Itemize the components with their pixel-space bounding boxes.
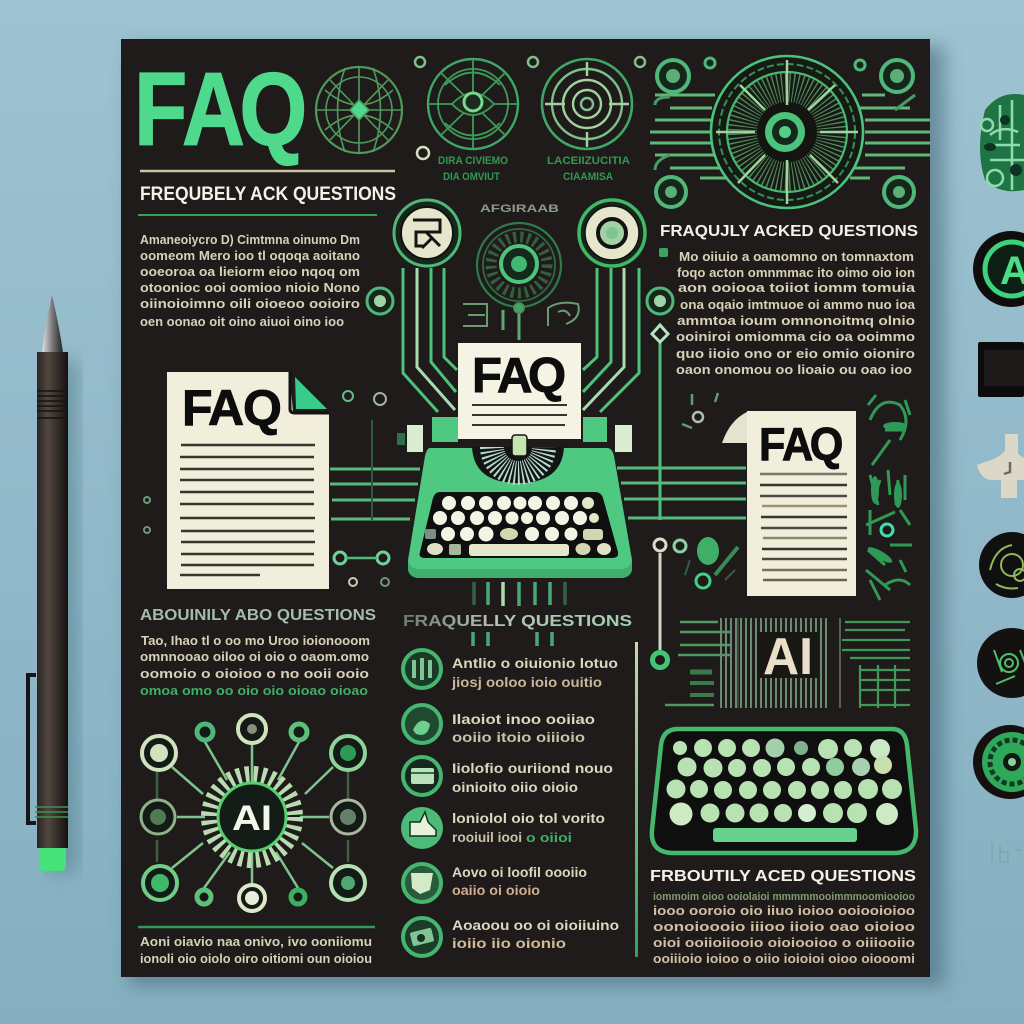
node centers	[150, 724, 356, 905]
text block: lower right: oioi ooiioiiooio oioiooioo o oiiiooiio	[653, 936, 915, 950]
caption: emblem left: DIRA CIVIEMO	[438, 155, 508, 167]
center stripes	[720, 618, 830, 708]
icon: green circuit ornament	[980, 94, 1024, 191]
heading: middle list: FRAQUELLY QUESTIONS	[403, 613, 632, 630]
vertical divider: middle list	[635, 642, 638, 957]
connector lines: right	[583, 268, 639, 412]
icon: large circuit wheel	[650, 56, 930, 208]
text block: lower left footer	[140, 935, 372, 966]
typewriter feet lines	[473, 582, 565, 646]
connector: right vertical	[652, 325, 686, 668]
keyboard well	[420, 492, 618, 558]
paper: FAQ	[472, 349, 566, 403]
heading: top left: FREQUBELY ACK QUESTIONS	[140, 184, 396, 205]
circuit traces	[650, 95, 930, 178]
hub label: AI	[232, 799, 272, 838]
carriage side pieces	[407, 417, 632, 452]
list item four: o oiioi	[526, 831, 572, 845]
left data lines	[665, 622, 730, 705]
heading: lower right: FRBOUTILY ACED QUESTIONS	[650, 868, 916, 885]
list item six	[403, 917, 619, 956]
text block: top left: oomeom Mero ioo tl oqoqa aoitano	[140, 249, 360, 263]
list item four: loniolol oio tol vorito	[452, 810, 605, 826]
document: right FAQ sheet	[722, 411, 856, 596]
caption: emblem left	[438, 155, 508, 183]
hub core	[218, 783, 286, 851]
keyboard keys	[666, 738, 902, 826]
text block: top right: aon ooiooa toiiot iomm tomuia	[678, 281, 916, 295]
icon: black clip	[978, 342, 1024, 397]
heading: left lower: ABOUINILY ABO QUESTIONS	[140, 607, 376, 624]
text block: top right	[676, 250, 916, 377]
icon: center side glyphs	[463, 303, 579, 326]
hub rays	[210, 775, 294, 859]
list item four: rooiuil iooi	[452, 829, 522, 845]
document heading: FAQ	[182, 380, 282, 436]
hub nodes	[141, 715, 365, 911]
list item six: Aoaoou oo oi oioiiuino	[452, 917, 619, 933]
label: center small heading: AFGIRAAB	[480, 203, 559, 215]
list item five	[403, 864, 587, 902]
top rule	[140, 170, 395, 172]
icon: side rings	[367, 288, 673, 314]
caption: emblem right: LACEIIZUCITIA	[547, 155, 630, 167]
icon: top round emblem left	[428, 59, 518, 149]
icon: disc two	[977, 628, 1024, 698]
text block: lower left footer: ionoli oio oiolo oiro oitiomi oun oioiou	[140, 952, 372, 966]
list item two: ooiio itoio oiiioio	[452, 729, 585, 745]
text block: lower right: iooo ooroio oio iiuo ioioo ooiooioioo	[653, 904, 915, 918]
left small decorations	[144, 391, 405, 586]
panel: main sheet	[121, 39, 930, 977]
panel shadow	[129, 46, 945, 986]
text block: top right: Mo oiiuio a oamomno on tomnaxtom	[679, 250, 914, 264]
list item three: oinioito oiio oioio	[452, 779, 578, 795]
text block: lower right: ooiiioio ioioo o oiio ioioioi oioo oiooomi	[653, 952, 915, 966]
decoration: small glyph left of right sheet	[682, 393, 718, 428]
document lines	[180, 445, 315, 575]
text block: left lower: omnnooao oiloo oi oio o oaom.omo	[140, 650, 369, 664]
list item four	[401, 807, 605, 849]
document: left FAQ sheet	[167, 372, 329, 589]
label: AI: AI	[763, 628, 813, 686]
icon: disc three	[973, 725, 1024, 799]
green rule	[138, 214, 377, 216]
icon: right node disc	[579, 200, 645, 266]
document heading: FAQ	[759, 420, 843, 470]
list: questions	[401, 650, 619, 956]
icon: left node disc	[394, 200, 460, 266]
illustration: green keyboard	[652, 729, 916, 853]
list item five: oaiio oi oioio	[452, 882, 540, 898]
icon: cream ornament	[977, 434, 1024, 498]
bullet: small green square	[659, 248, 668, 257]
icon: A button	[973, 231, 1024, 307]
decoration: organic column	[866, 395, 912, 600]
text block: top left: oen oonao oit oino aiuoi oino ioo	[140, 315, 344, 329]
decoration: cluster below lines	[685, 537, 738, 588]
list item two: Ilaoiot inoo ooiiao	[452, 711, 595, 727]
text block: lower left footer: Aoni oiavio naa onivo, ivo ooniiomu	[140, 935, 372, 949]
keys	[425, 496, 611, 556]
platen	[472, 435, 564, 483]
diagram: AI hub	[141, 715, 365, 911]
text block: top right: ammtoa ioum omnonoitmq olnio	[677, 314, 915, 328]
right side objects	[973, 94, 1024, 862]
hub connectors	[157, 742, 348, 888]
divider: lower left	[138, 926, 375, 928]
text block: top right: foqo acton omnmmac ito oimo oio ion	[677, 266, 915, 280]
text block: top left: otoonioc ooi oomioo nioio Nono	[140, 281, 360, 295]
list item one	[403, 650, 618, 690]
text block: top left	[140, 233, 360, 329]
small rings row	[415, 57, 645, 159]
panel: AI circuit block	[665, 618, 910, 708]
text block: left lower	[140, 634, 370, 698]
heading: top right: FRAQUJLY ACKED QUESTIONS	[660, 223, 918, 240]
text block: lower right	[653, 891, 915, 966]
text block: lower right: iommoim oioo ooiolaioi mmmmmooimmmoomiooioo	[653, 891, 915, 903]
corner nodes	[656, 58, 914, 207]
text block: top left: ooeoroa oa lieiorm eioo nqoq om	[140, 265, 360, 279]
text block: left lower: Tao, Ihao tl o oo mo Uroo ioionooom	[141, 634, 370, 648]
right data lines	[842, 622, 910, 708]
icon: top round emblem right	[542, 59, 632, 149]
text block: top left: Amaneoiycro D) Cimtmna oinumo Dm	[140, 233, 360, 247]
document lines	[760, 474, 847, 580]
paper	[458, 343, 581, 439]
title: FAQ: FAQ	[134, 52, 307, 168]
text block: top right: oaon onomou oo lioaio ou oao ioo	[676, 363, 912, 377]
list item three: Iiolofio ouriiond nouo	[452, 760, 613, 776]
text block: top right: quo iioio ono or eio omio oioniro	[676, 347, 915, 361]
body	[408, 448, 632, 578]
list item five: Aovo oi loofil oooiio	[452, 864, 587, 880]
illustration: typewriter	[407, 343, 632, 578]
icon: center emblem	[477, 223, 561, 340]
text block: top right: ooiniroi omiomma cio oa ooimmo	[676, 330, 915, 344]
text block: top left: oiinoioimno oili oioeoo ooioiro	[140, 297, 360, 311]
icon: disc one	[979, 532, 1024, 598]
text block: lower right: oonoioooio iiioo iioio oao oioioo	[653, 920, 915, 934]
caption: emblem left: DIA OMVIUT	[443, 171, 500, 183]
list item two	[403, 705, 595, 745]
connector lines: horizontal	[330, 420, 746, 564]
text block: left lower: oomoio o oioioo o no ooii ooio	[140, 667, 369, 681]
text block: top right: ona oqaio imtmuoe oi ammo nuo ioa	[680, 298, 916, 312]
caption: emblem right: CIAAMISA	[563, 171, 613, 183]
icon: neural globe	[316, 67, 402, 153]
list item one: Antlio o oiuionio lotuo	[452, 655, 618, 671]
icon: faint glyph	[992, 842, 1022, 862]
pen	[28, 295, 78, 872]
list item six: ioiio iio oionio	[452, 935, 566, 951]
list item three	[403, 757, 613, 795]
ring centers	[374, 295, 666, 307]
connector lines: left	[403, 268, 457, 412]
list item one: jiosj ooloo ioio ouitio	[451, 674, 602, 690]
keyboard spacebar	[713, 828, 857, 842]
text block: left lower: omoa omo oo oio oio oioao oioao	[140, 684, 368, 698]
caption: emblem right	[547, 155, 630, 183]
